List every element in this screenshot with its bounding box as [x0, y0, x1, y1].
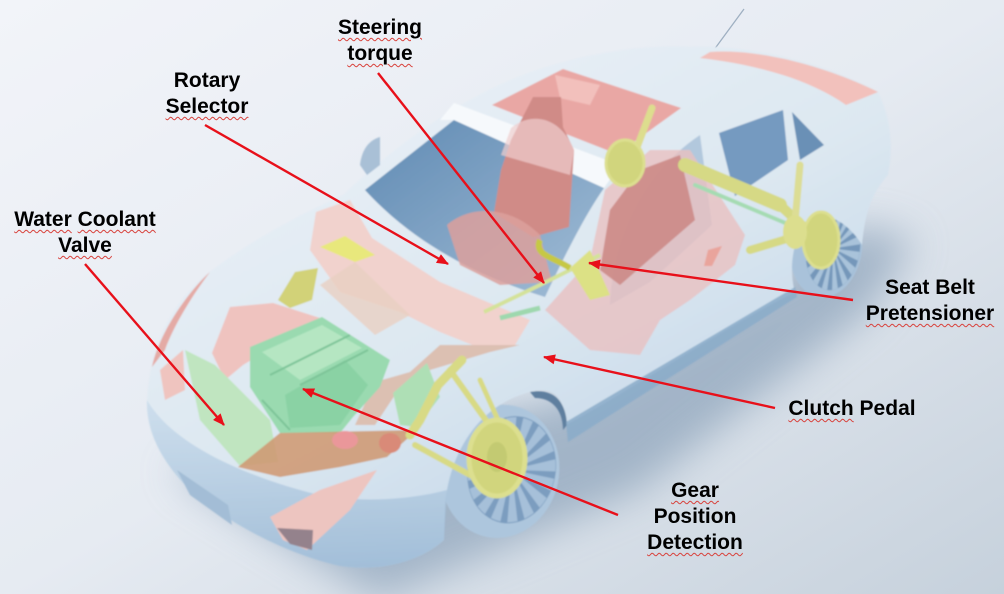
front suspension [410, 360, 525, 496]
rear strut left [606, 108, 652, 186]
label: gear position detection: Gear [671, 479, 719, 502]
label: steering torque: torque [347, 42, 413, 65]
white roof band [440, 103, 620, 188]
antenna [700, 9, 744, 62]
engine [250, 317, 390, 433]
label: water coolant valve [14, 76, 847, 508]
seat belt pretensioner [570, 250, 610, 300]
arrow: seat belt pretensioner [589, 263, 853, 300]
lower pink fascia [270, 470, 377, 550]
arrow: gear position detection [303, 389, 618, 515]
rocker panel [566, 287, 797, 442]
yellow pump [278, 268, 318, 308]
car body [147, 47, 891, 568]
label: gear position detection [647, 479, 743, 556]
label: water coolant valve: Valve [58, 234, 112, 257]
label: rotary selector: Selector [166, 95, 248, 118]
arrow: steering torque [378, 73, 544, 283]
underhood pink ducting [212, 200, 530, 425]
windshield [365, 120, 604, 297]
ground shadow [170, 225, 915, 594]
label: gear position detection: Detection [647, 531, 743, 554]
rear wheel [783, 193, 869, 302]
headlight left [152, 272, 210, 367]
green battery [393, 363, 440, 427]
label: gear position detection: Position [654, 505, 736, 528]
bumper pink insert [160, 350, 185, 400]
rear axle [685, 165, 839, 268]
label: rotary selector [166, 69, 248, 120]
green floor tube [500, 308, 540, 318]
side windows [610, 110, 824, 305]
label: steering torque [338, 16, 422, 68]
rear deck spoiler [700, 51, 878, 105]
side mirror [360, 137, 380, 175]
coolant reservoir [320, 236, 375, 262]
far seat [447, 97, 574, 285]
front air intake [277, 528, 313, 550]
sunroof interior [492, 69, 681, 154]
label: steering torque: Steering [338, 16, 422, 39]
lower grille [177, 470, 232, 525]
steering shaft [484, 255, 600, 312]
arrow: clutch pedal [544, 357, 775, 408]
label: seat belt pretensioner: Pretensioner [866, 302, 994, 325]
label: seat belt pretensioner: Seat Belt [885, 276, 975, 299]
label: rotary selector: Rotary [174, 69, 240, 92]
label: seat belt pretensioner [866, 276, 994, 328]
steering wheel [539, 240, 570, 268]
fuse box [320, 262, 410, 335]
rear seat panel [555, 75, 600, 105]
door handle [704, 246, 722, 266]
headlamp [238, 430, 417, 477]
red arrows [85, 73, 853, 515]
arrow: rotary selector [205, 125, 448, 264]
near seat [545, 150, 745, 355]
wheel arch shadow [530, 391, 567, 430]
label: clutch pedal: Clutch Pedal [788, 397, 916, 420]
radiator [185, 350, 278, 466]
brake ducts [332, 431, 401, 453]
front wheel [428, 394, 572, 549]
label: water coolant valve: Water Coolant [14, 208, 156, 231]
arrow: water coolant valve [85, 264, 224, 425]
front bumper [147, 400, 447, 568]
